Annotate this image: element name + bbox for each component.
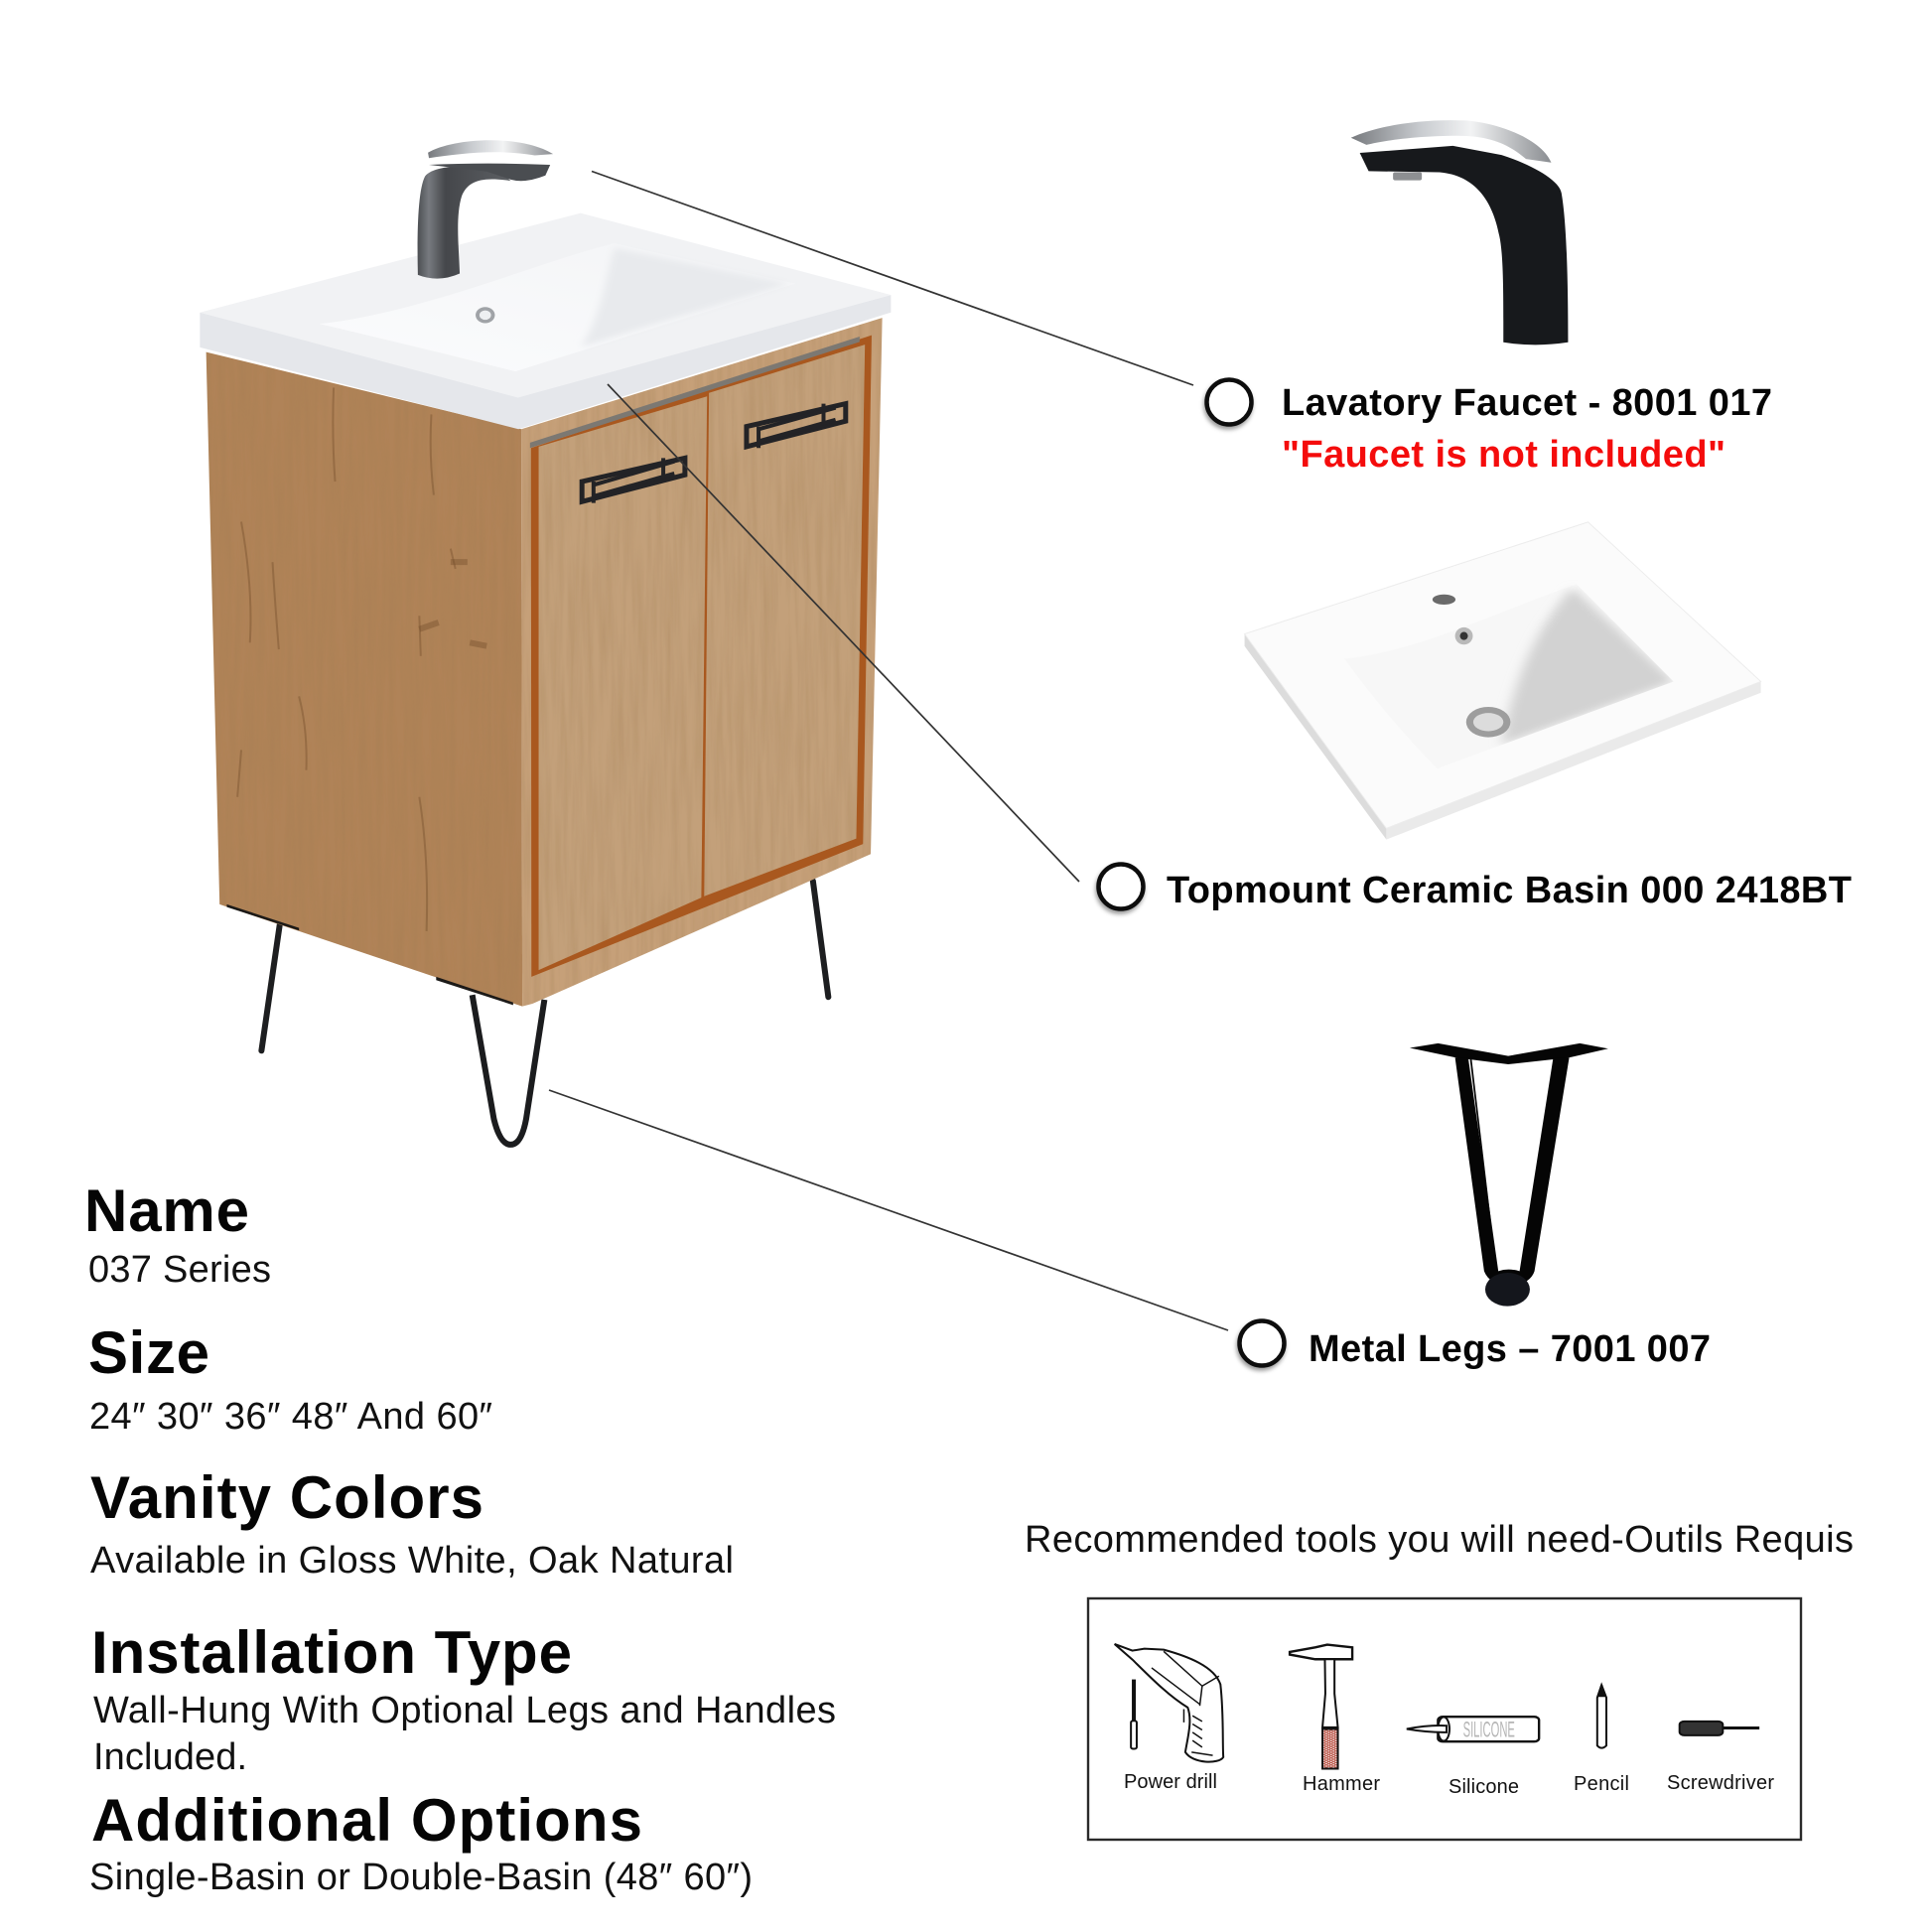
vanity cabinet product photo	[200, 140, 891, 1145]
spec: additional options: Single-Basin or Double-Basin (48″ 60″)	[89, 1857, 753, 1898]
back legs	[261, 881, 828, 1050]
basin bowl	[1344, 585, 1674, 768]
faucet hole	[1433, 595, 1455, 605]
icon: hammer	[1290, 1645, 1352, 1768]
basin top	[1245, 522, 1761, 828]
spec: size	[88, 1319, 492, 1438]
faucet body	[1360, 146, 1568, 345]
spec: installation type: Included.	[93, 1736, 247, 1778]
tool caption: screwdriver: Screwdriver	[1667, 1772, 1774, 1794]
not included warning: "Faucet is not included"	[1282, 434, 1725, 476]
side panel wood knots	[237, 387, 486, 931]
legs label: Metal Legs – 7001 007	[1309, 1328, 1711, 1370]
callout line: basin	[608, 384, 1079, 882]
right door	[704, 345, 865, 897]
pop-up drain	[1466, 707, 1510, 738]
spec: vanity colors: Available in Gloss White, Oak Natural	[90, 1540, 734, 1582]
legs marker ring	[1239, 1320, 1285, 1366]
callout line: faucet	[592, 171, 1193, 385]
spec: additional options	[89, 1787, 753, 1898]
spec: vanity colors	[90, 1464, 734, 1582]
cabinet side panel	[207, 352, 522, 1007]
icon: power drill	[1115, 1644, 1223, 1762]
cabinet front frame	[521, 318, 883, 1007]
faucet label: Lavatory Faucet - 8001 017	[1282, 382, 1772, 424]
spec: installation type: Wall-Hung With Optional Legs and Handles	[93, 1690, 836, 1731]
spec: installation type: Installation Type	[91, 1619, 572, 1686]
basin front edge	[1386, 681, 1761, 840]
overflow hole	[1455, 627, 1472, 644]
rubber foot	[1485, 1273, 1530, 1307]
tools panel	[1088, 1598, 1801, 1840]
spec: name: Name	[84, 1177, 249, 1244]
basin label: Topmount Ceramic Basin 000 2418BT	[1167, 870, 1852, 911]
basin top rim mask	[1577, 523, 1758, 681]
hairpin front leg	[473, 995, 544, 1145]
icon: silicone tube: SILICONE	[1463, 1717, 1515, 1742]
spec: size: 24″ 30″ 36″ 48″ And 60″	[89, 1396, 492, 1438]
right door handle	[747, 404, 846, 448]
tool caption: pencil: Pencil	[1574, 1773, 1629, 1795]
vanity faucet	[418, 140, 553, 279]
thin rear rod	[1470, 1059, 1491, 1223]
sink countertop edge	[200, 295, 891, 429]
spec: name	[84, 1177, 271, 1291]
tool caption: hammer: Hammer	[1303, 1773, 1380, 1795]
spec: additional options: Additional Options	[91, 1787, 642, 1854]
icon: screwdriver	[1680, 1722, 1759, 1735]
basin lower rim mask	[1389, 681, 1758, 826]
sink bowl ridge shading	[581, 248, 790, 347]
tool caption: power drill: Power drill	[1124, 1771, 1217, 1793]
left door handle	[582, 458, 685, 503]
basin marker ring	[1098, 864, 1144, 909]
ceramic basin product image	[1245, 522, 1761, 840]
upper recess gap	[530, 337, 860, 448]
cabinet mounting rail shadows	[226, 904, 513, 1005]
metal leg product image	[1410, 1043, 1608, 1307]
chrome lever	[1351, 120, 1551, 163]
faucet marker ring	[1207, 379, 1251, 425]
tool illustrations	[1115, 1644, 1759, 1768]
left door	[539, 396, 707, 970]
basin bowl shaded back wall	[1501, 588, 1674, 745]
icon: pencil	[1597, 1685, 1606, 1748]
callout line: legs	[549, 1090, 1228, 1330]
spec: installation type	[91, 1619, 836, 1778]
spec: size: Size	[88, 1319, 209, 1386]
faucet product image	[1351, 120, 1568, 345]
sink bowl	[320, 243, 795, 371]
tools heading: Recommended tools you will need-Outils Requis	[1025, 1519, 1854, 1561]
recess edge	[531, 336, 872, 977]
tool caption: silicone: Silicone	[1449, 1776, 1519, 1798]
sink countertop	[200, 213, 891, 398]
mounting plate	[1410, 1043, 1608, 1064]
aerator	[1393, 172, 1422, 181]
spec: name: 037 Series	[88, 1249, 271, 1291]
basin left edge	[1245, 634, 1386, 840]
icon: silicone tube	[1407, 1717, 1539, 1742]
hairpin rods	[1455, 1057, 1570, 1286]
spec: vanity colors: Vanity Colors	[90, 1464, 483, 1531]
overflow drain	[476, 307, 494, 324]
